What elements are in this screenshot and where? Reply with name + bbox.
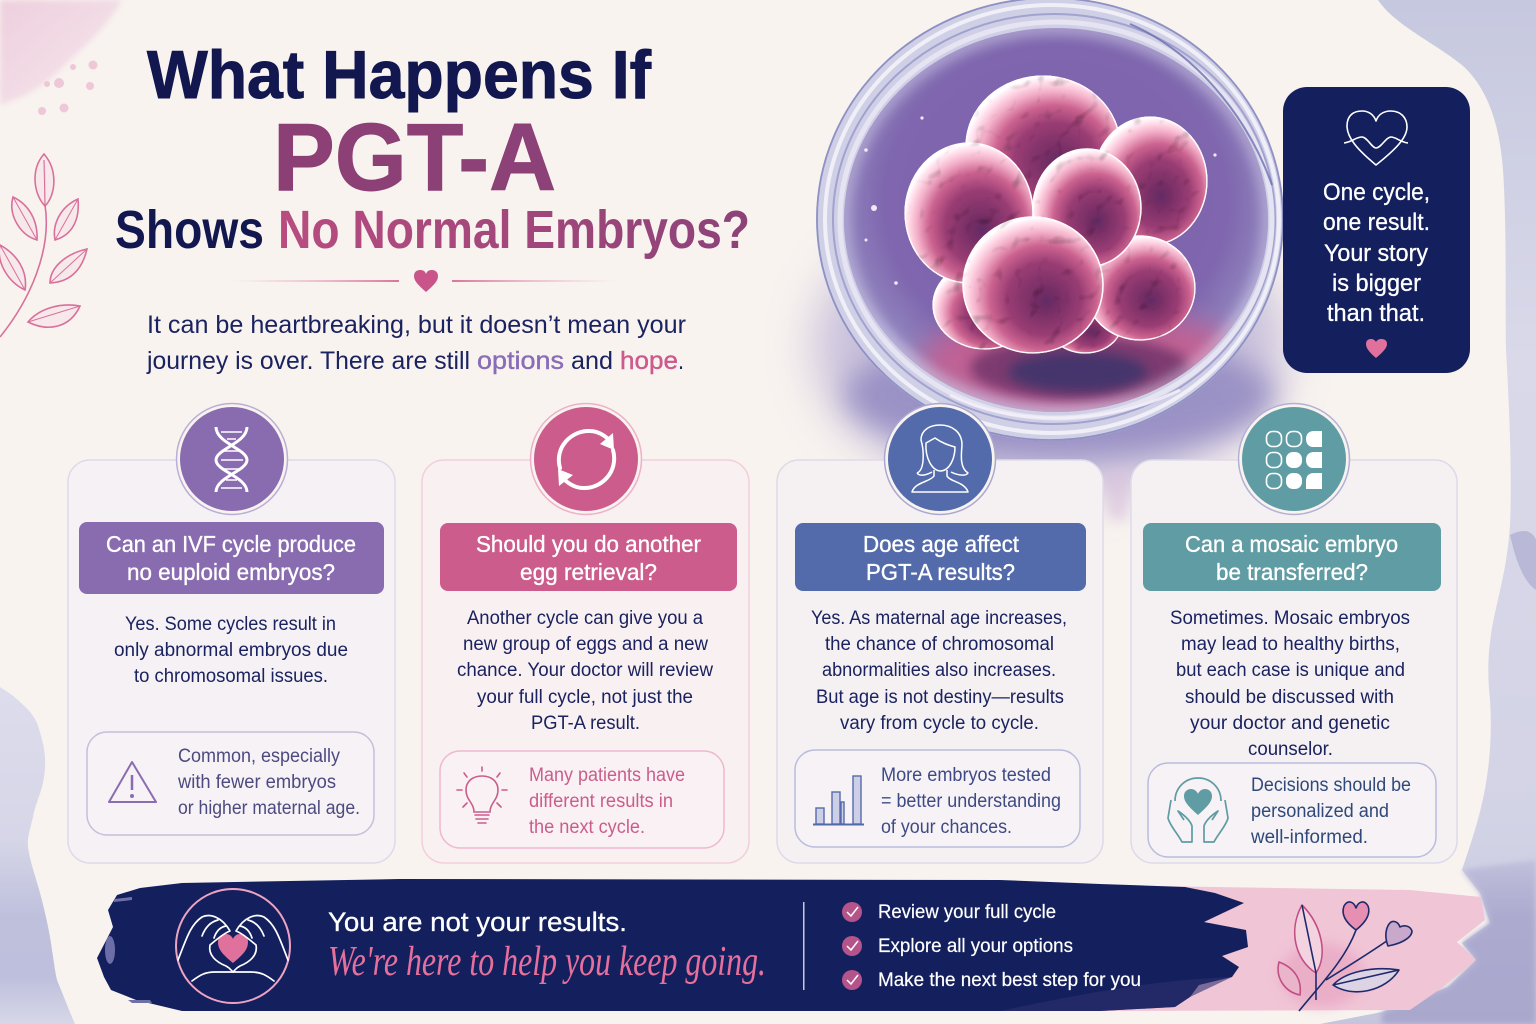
callout: decisions: well-informed. <box>1250 827 1368 848</box>
panel: card 2 another retrieval: PGT-A result. <box>531 713 640 734</box>
panel: card 2 another retrieval: egg retrieval? <box>520 559 657 585</box>
callout: decisions: Decisions should be <box>1251 775 1411 796</box>
panel: card 1 euploid: Yes. Some cycles result in <box>125 614 336 635</box>
callout: one cycle: than that. <box>1327 300 1425 327</box>
title: Shows <box>115 200 264 260</box>
panel: card 3 age: abnormalities also increases. <box>822 660 1056 681</box>
panel: card 1 euploid: no euploid embryos? <box>127 559 335 585</box>
subtitle: journey is over. There are still <box>146 347 470 375</box>
panel: card 2 another retrieval: new group of eggs and a new <box>463 634 708 655</box>
banner: you are not your results <box>97 879 1485 1011</box>
subtitle: options <box>477 347 564 375</box>
panel: card 3 age <box>777 404 1103 863</box>
title: What Happens If <box>147 37 651 113</box>
panel: card 4 mosaic: your doctor and genetic <box>1190 713 1390 734</box>
panel: card 1 euploid: to chromosomal issues. <box>134 666 328 687</box>
checklist: Make the next best step for you <box>878 970 1141 991</box>
callout: one cycle: One cycle, <box>1323 179 1430 206</box>
callout: decisions <box>1148 763 1436 857</box>
icon: hands forming heart <box>176 889 290 1003</box>
panel: card 2 another retrieval: chance. Your doctor will review <box>457 660 713 681</box>
callout: decisions: personalized and <box>1251 801 1389 822</box>
title <box>115 37 750 260</box>
callout: one cycle: is bigger <box>1332 270 1421 297</box>
panel: card 3 age: vary from cycle to cycle. <box>840 713 1039 734</box>
panel: card 1 euploid: Can an IVF cycle produce <box>106 531 356 557</box>
embryo in petri dish <box>815 0 1285 520</box>
panel: card 2 another retrieval: your full cycle, not just the <box>477 687 693 708</box>
icon: refresh arrows <box>530 404 642 514</box>
panel: card 4 mosaic: may lead to healthy births, <box>1181 634 1400 655</box>
callout: more embryos tested <box>795 750 1080 847</box>
banner: you are not your results: We're here to help you keep going. <box>328 939 766 985</box>
panel: card 3 age: Does age affect <box>863 531 1020 557</box>
panel: card 4 mosaic: be transferred? <box>1216 559 1368 585</box>
panel: card 3 age: But age is not destiny—results <box>816 687 1064 708</box>
callout: one cycle: Your story <box>1324 240 1428 267</box>
callout: many patients <box>440 751 724 848</box>
panel: card 3 age: the chance of chromosomal <box>825 634 1054 655</box>
icon: floral sprig <box>1278 902 1412 1011</box>
callout: common: with fewer embryos <box>177 772 336 793</box>
panel: card 4 mosaic <box>1131 404 1457 863</box>
icon: bar chart <box>813 776 864 824</box>
panel: card 3 age: Yes. As maternal age increases, <box>811 608 1067 629</box>
subtitle: . <box>678 347 684 375</box>
icon: hands holding heart <box>1168 778 1228 842</box>
panel: card 2 another retrieval: Another cycle can give you a <box>467 608 703 629</box>
icon: DNA helix <box>176 404 288 514</box>
icon: small heart <box>1366 339 1387 358</box>
title: No Normal Embryos? <box>278 200 750 260</box>
callout: many patients: Many patients have <box>529 765 685 786</box>
subtitle: and <box>571 347 613 375</box>
icon: mosaic cell grid <box>1238 404 1350 514</box>
panel: card 3 age: PGT-A results? <box>866 559 1015 585</box>
panel: card 4 mosaic: Can a mosaic embryo <box>1185 531 1398 557</box>
checklist <box>842 902 1141 991</box>
callout: common: or higher maternal age. <box>178 798 360 819</box>
callout: more embryos tested: = better understanding <box>881 791 1061 812</box>
callout: many patients: different results in <box>529 791 673 812</box>
panel: card 1 euploid: only abnormal embryos due <box>114 640 348 661</box>
panel: card 4 mosaic: should be discussed with <box>1185 687 1394 708</box>
callout: more embryos tested: of your chances. <box>881 817 1012 838</box>
callout: one cycle <box>1283 87 1470 373</box>
icon: woman outline <box>884 404 996 514</box>
title: PGT-A <box>273 104 556 211</box>
subtitle <box>146 311 686 375</box>
checklist: Review your full cycle <box>878 902 1056 923</box>
callout: common <box>87 732 374 835</box>
icon: light bulb <box>457 767 507 823</box>
icon: heart divider <box>414 270 438 292</box>
checklist: Explore all your options <box>878 936 1073 957</box>
panel: card 2 another retrieval: Should you do another <box>476 531 701 557</box>
icon: warning triangle <box>109 762 156 802</box>
callout: one cycle: one result. <box>1323 209 1430 236</box>
subtitle: It can be heartbreaking, but it doesn’t mean your <box>147 311 686 339</box>
icon: heart with pulse <box>1344 111 1408 165</box>
panel: card 4 mosaic: Sometimes. Mosaic embryos <box>1170 608 1410 629</box>
subtitle: hope <box>620 347 678 375</box>
panel: card 1 euploid <box>68 404 395 863</box>
panel: card 4 mosaic: but each case is unique and <box>1176 660 1405 681</box>
panel: card 2 another retrieval <box>422 404 749 863</box>
callout: more embryos tested: More embryos tested <box>881 765 1051 786</box>
panel: card 4 mosaic: counselor. <box>1248 739 1333 760</box>
callout: common: Common, especially <box>178 746 340 767</box>
callout: many patients: the next cycle. <box>529 817 645 838</box>
icon: decorative leaf branch <box>0 154 87 337</box>
banner: you are not your results: You are not your results. <box>328 907 627 937</box>
